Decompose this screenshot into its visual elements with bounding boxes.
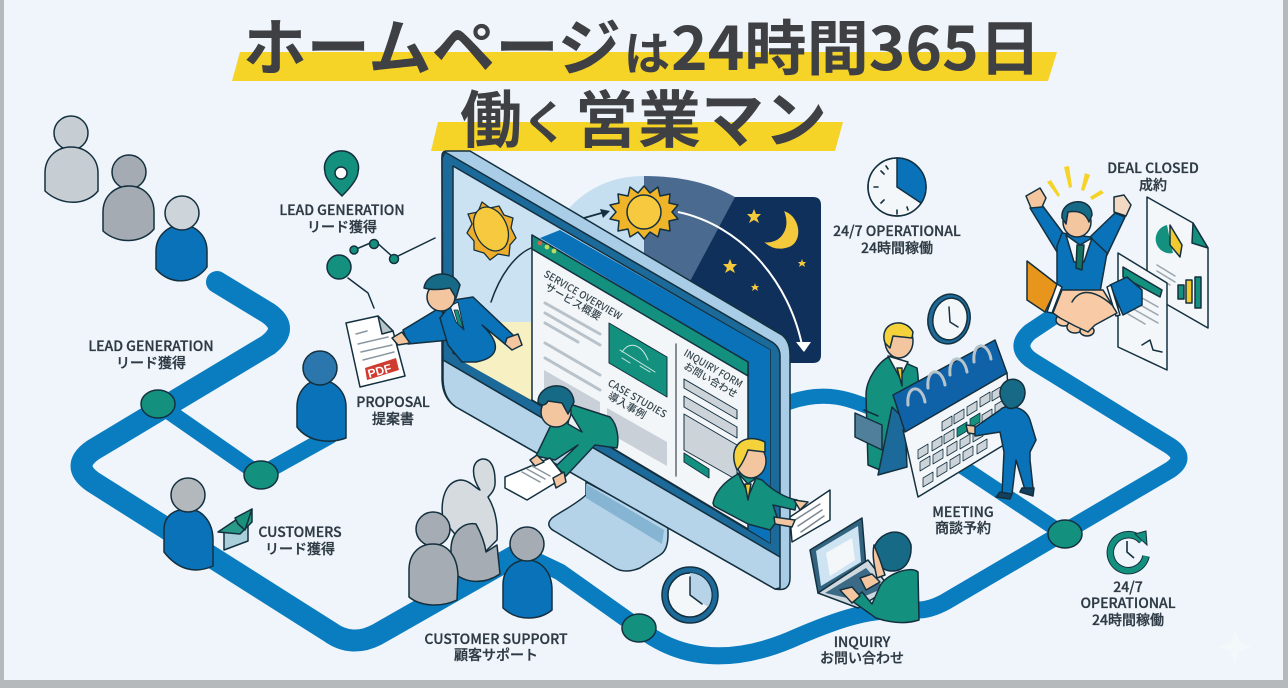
label: 24/7 lower: OPERATIONAL — [1080, 593, 1176, 613]
window text: service overview: SERVICE OVERVIEW — [542, 266, 625, 323]
monitor stand — [549, 482, 668, 571]
day sky arc — [540, 176, 644, 300]
route nodes — [141, 390, 1082, 642]
calendar cells — [918, 386, 1005, 487]
window text: service overview: サービス概要 — [542, 279, 604, 324]
journey path — [82, 282, 1179, 656]
label: inquiry: INQUIRY — [834, 632, 890, 652]
label: customers: リード獲得 — [265, 539, 335, 559]
title line 1: ホームページ — [243, 0, 621, 88]
arrow: sun path — [584, 212, 605, 218]
title highlight band 2 — [431, 122, 843, 151]
title line 2: 働 — [460, 70, 522, 160]
torso — [440, 297, 513, 362]
person: lead blue — [156, 196, 207, 281]
clock: wall — [923, 290, 975, 348]
calendar stand — [878, 407, 907, 475]
browser window — [532, 235, 748, 529]
calendar rings — [908, 346, 991, 405]
icon: sun sky — [610, 186, 678, 239]
night sky panel — [540, 176, 821, 363]
monitor screen — [453, 166, 770, 543]
hands — [1053, 290, 1117, 332]
label: inquiry: お問い合わせ — [820, 648, 904, 668]
laptop user — [810, 518, 919, 623]
label: customer support: CUSTOMER SUPPORT — [424, 629, 568, 649]
person: lead grey 1 — [45, 116, 98, 202]
person: proposal blue — [297, 351, 346, 441]
man: celebrating — [1026, 188, 1131, 292]
label: customers: CUSTOMERS — [258, 522, 342, 542]
window text: service overview — [542, 266, 625, 420]
title line 2: く — [522, 87, 568, 153]
person: lead grey 2 — [103, 155, 154, 241]
arms — [1030, 205, 1063, 252]
title line 1: 24時間365日 — [671, 1, 1041, 88]
label: lead generation top: LEAD GENERATION — [279, 200, 405, 220]
window text: case studies — [605, 375, 670, 466]
monitor chin — [443, 360, 780, 589]
title line 1: は — [624, 18, 670, 84]
icon: paper plane envelope — [218, 509, 252, 550]
monitor bezel — [442, 152, 780, 557]
ghost support person — [442, 459, 497, 552]
celebration rays — [1047, 166, 1104, 200]
label: deal closed: 成約 — [1139, 175, 1167, 195]
monitor outer frame — [442, 151, 790, 590]
fist — [505, 334, 522, 350]
stars — [723, 209, 806, 291]
arc on screen — [491, 248, 531, 302]
label: deal closed: DEAL CLOSED — [1107, 158, 1199, 178]
icon: 24/7 refresh clock — [1110, 531, 1147, 571]
label: proposal: 提案書 — [372, 409, 414, 429]
man: blond green suit with briefcase — [855, 323, 918, 470]
window inquiry form: INQUIRY FORM — [682, 345, 746, 391]
label: 24/7 upper: 24時間稼働 — [861, 238, 933, 258]
head — [427, 283, 455, 311]
label: customer support: 顧客サポート — [454, 645, 538, 665]
fingers — [1056, 314, 1094, 336]
pdf document — [346, 316, 405, 387]
network dots — [327, 238, 435, 308]
arrow: day to night — [678, 212, 803, 350]
window blue backing — [540, 230, 770, 543]
window text: case studies: CASE STUDIES — [606, 375, 670, 421]
man: green suit reaching down — [505, 386, 618, 500]
arm to pdf — [403, 307, 450, 344]
label: meeting: MEETING — [932, 502, 994, 522]
label: lead generation left: リード獲得 — [116, 353, 186, 373]
label: lead generation top: リード獲得 — [307, 217, 377, 237]
labels — [88, 158, 1199, 668]
title — [232, 0, 1057, 160]
title highlight band 1 — [232, 52, 1057, 81]
fists — [1026, 188, 1046, 208]
window image card — [609, 323, 667, 397]
man: blue suit leaning out — [392, 274, 522, 362]
window inquiry form — [682, 345, 746, 480]
laptop screen — [810, 518, 866, 593]
label: 24/7 lower: 24時間稼働 — [1092, 610, 1164, 630]
laptop person — [852, 570, 919, 623]
document: contract — [1118, 253, 1167, 370]
calendar — [878, 340, 1012, 497]
dusk wedge — [644, 176, 735, 300]
title line 2: 営業マン — [575, 70, 827, 160]
calendar header — [893, 340, 1007, 432]
paper — [505, 458, 565, 500]
clock: top 24h — [868, 158, 926, 216]
grey support person back — [451, 524, 500, 581]
briefcase — [855, 413, 882, 450]
label: lead generation left: LEAD GENERATION — [88, 336, 214, 356]
man: blue suit at calendar — [966, 379, 1036, 499]
clock: bottom — [662, 567, 718, 623]
label: proposal: PROPOSAL — [356, 392, 430, 412]
right sleeve — [1110, 277, 1142, 315]
label: 24/7 upper: 24/7 OPERATIONAL — [833, 221, 961, 241]
blue support person — [503, 560, 552, 618]
head — [1063, 207, 1091, 237]
screen ground — [460, 322, 531, 400]
icon: moon — [766, 212, 798, 248]
icon: sun in screen — [467, 201, 516, 260]
label: meeting: 商談予約 — [935, 518, 991, 538]
window inquiry form: お問い合わせ — [682, 358, 741, 401]
document: chart report — [1147, 197, 1208, 328]
label: 24/7 lower: 24/7 — [1113, 577, 1143, 597]
grey support person front — [416, 512, 450, 546]
handshake — [1027, 261, 1142, 336]
man: blond green suit — [713, 439, 830, 542]
calendar page — [903, 373, 1012, 497]
laptop base — [818, 560, 890, 608]
support group — [409, 459, 552, 618]
window divider — [675, 344, 677, 476]
monitor — [442, 151, 790, 590]
paper — [790, 490, 830, 542]
browser title bar — [532, 235, 748, 376]
person: customer blue — [164, 478, 213, 570]
icon: location pin — [324, 151, 358, 196]
left cuff orange sleeve — [1027, 261, 1058, 312]
window text: case studies: 導入事例 — [605, 388, 649, 422]
pdf document: PDF — [366, 361, 393, 381]
torso — [1057, 233, 1107, 292]
